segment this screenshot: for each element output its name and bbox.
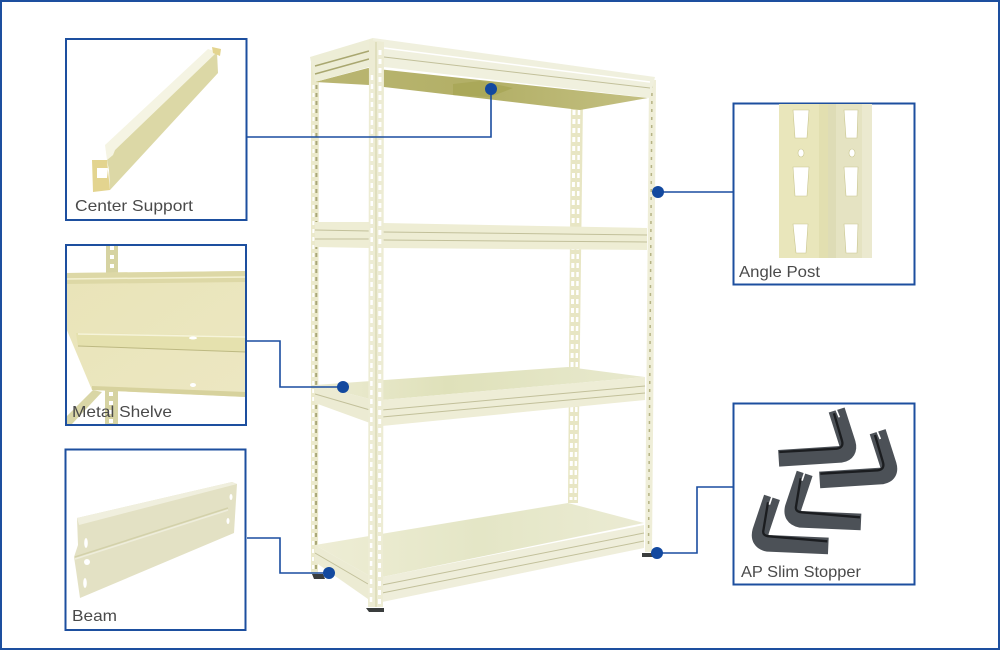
label: AP slim stopper: AP Slim Stopper <box>741 564 862 581</box>
panel: center support <box>66 39 246 220</box>
label: beam: Beam <box>72 608 117 625</box>
icon: center support bar <box>92 47 221 192</box>
connector: metal shelve <box>247 341 349 393</box>
connector: angle post <box>652 186 733 198</box>
label: center support: Center Support <box>75 198 194 215</box>
frame <box>66 245 246 425</box>
front left post <box>368 40 384 607</box>
feet and stoppers <box>312 553 655 612</box>
icon: four stoppers <box>760 409 889 546</box>
connector: beam <box>247 538 335 579</box>
rear right post <box>568 100 583 503</box>
label: angle post: Angle Post <box>739 264 821 281</box>
connector: AP slim stopper <box>651 487 733 559</box>
third shelf <box>315 367 645 426</box>
shelving rack <box>310 38 656 612</box>
photo: angle post <box>779 104 872 258</box>
photo: metal shelve underside <box>66 245 246 424</box>
rear left post <box>311 58 319 574</box>
panel: metal shelve <box>66 245 246 425</box>
front right post <box>645 80 656 552</box>
panel: AP slim stopper <box>734 404 914 584</box>
second shelf <box>315 222 647 250</box>
label: metal shelve: Metal Shelve <box>72 404 172 421</box>
bottom shelf <box>315 503 644 602</box>
connector: center support <box>247 83 497 137</box>
icon: beam <box>74 482 237 598</box>
panel: angle post <box>734 104 914 284</box>
top shelf <box>310 38 655 110</box>
panel: beam <box>66 450 246 630</box>
